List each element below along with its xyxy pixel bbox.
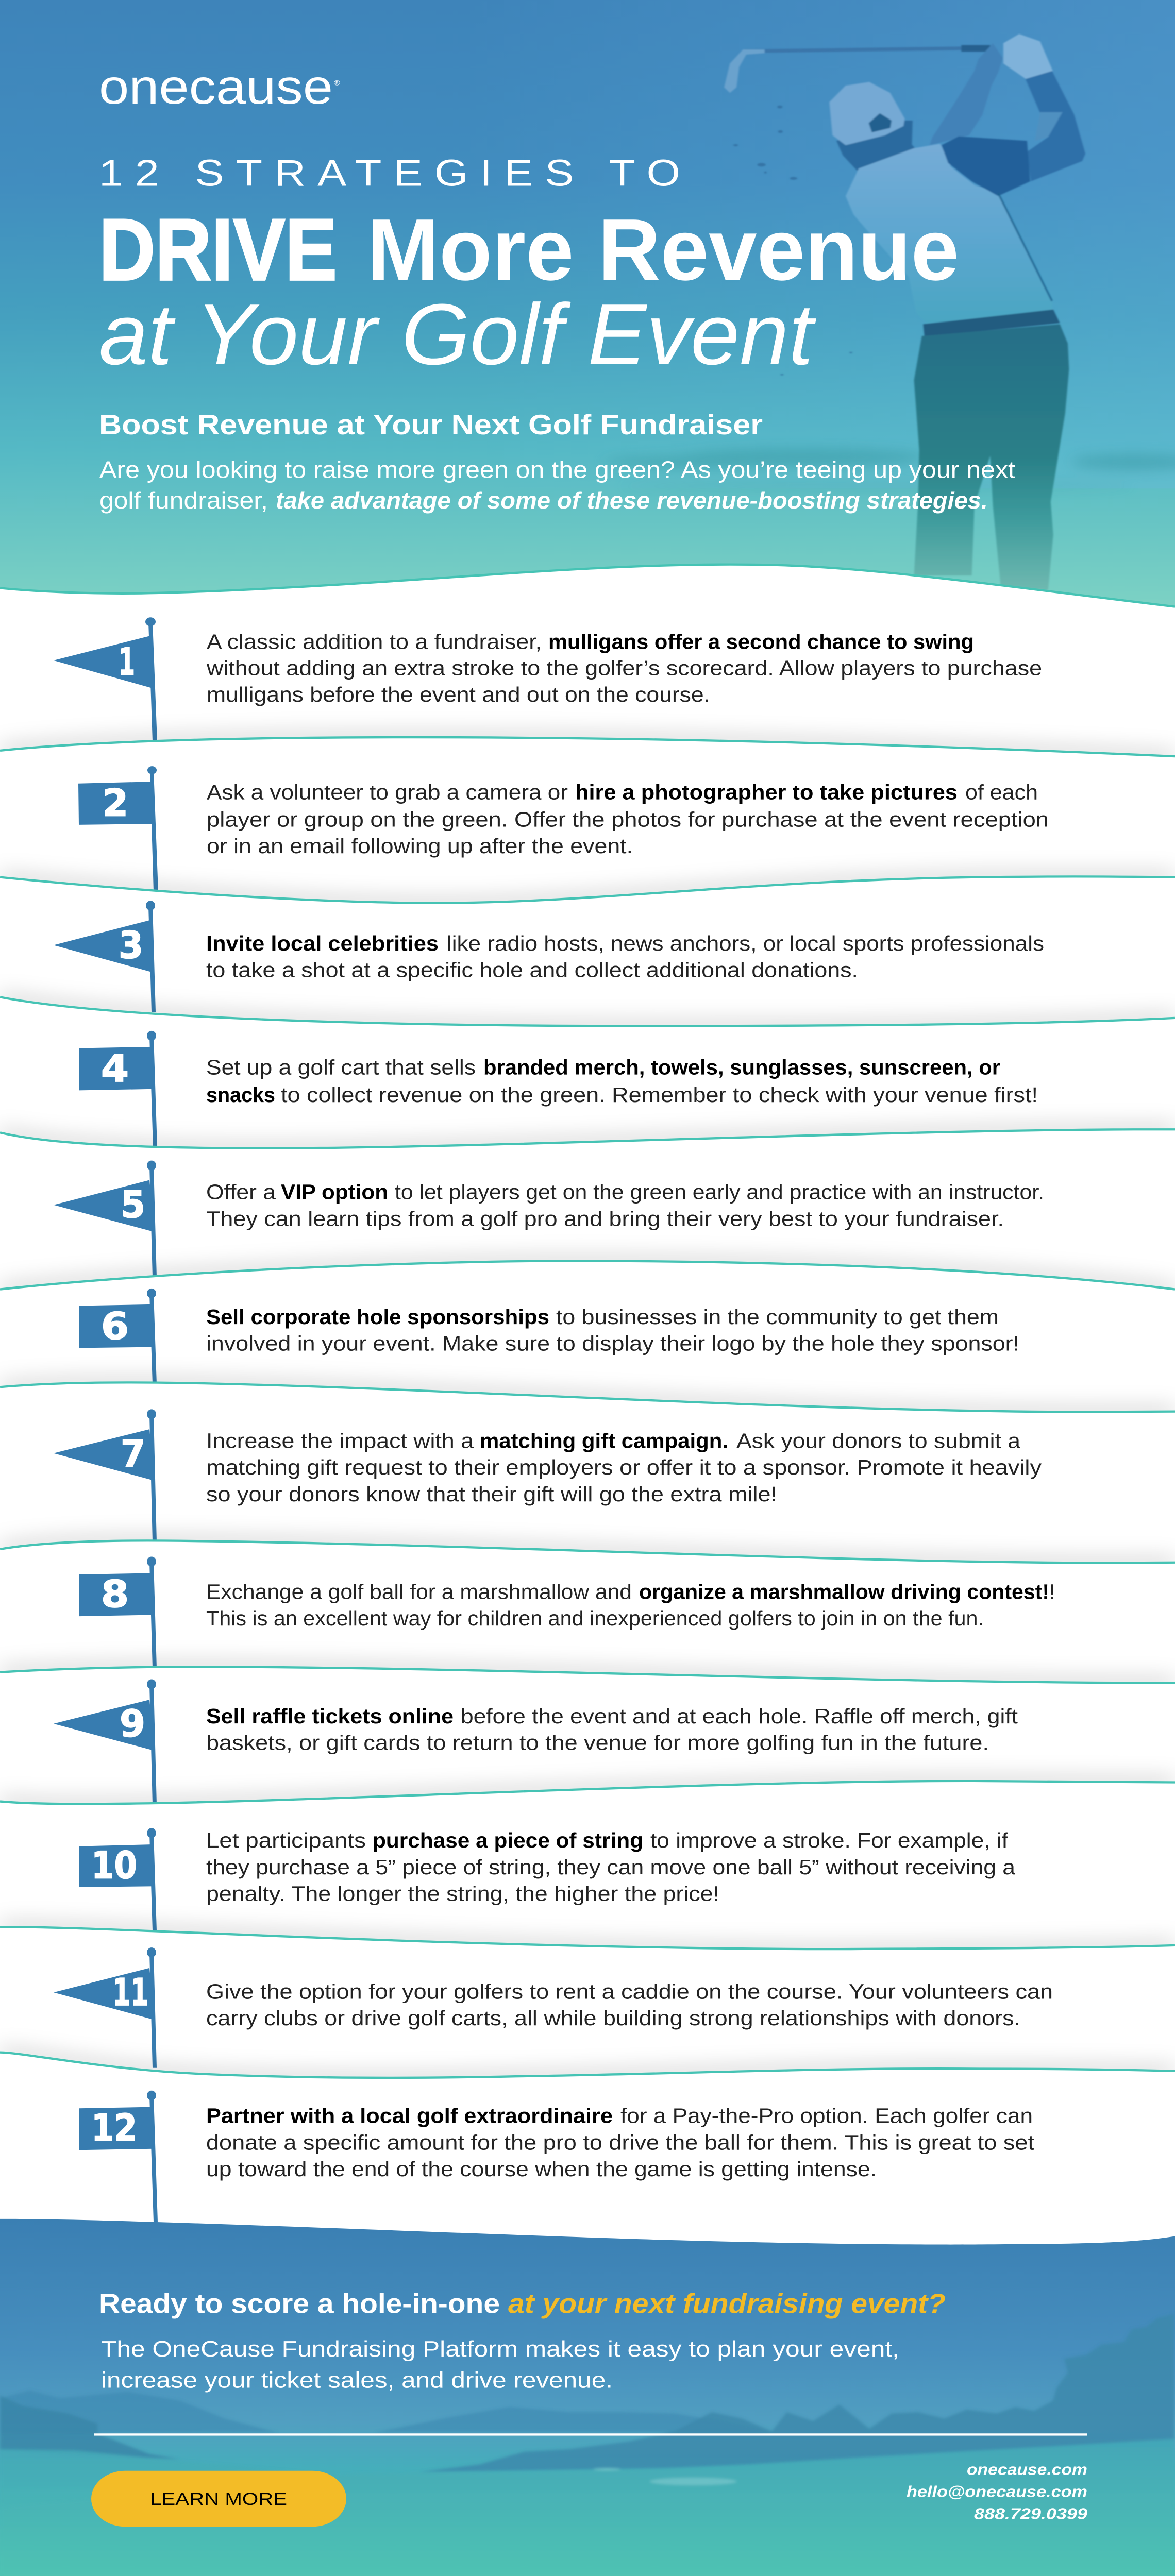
strategy 4 text: Set up a golf cart that sells xyxy=(206,1056,476,1079)
belt xyxy=(923,310,1060,337)
flag 9 xyxy=(54,1679,157,1805)
title: DRIVE xyxy=(99,201,337,298)
strategy 8 text xyxy=(206,1580,1055,1630)
strategy 5 text: Offer a xyxy=(206,1181,276,1204)
strategy 2 text xyxy=(207,781,1049,858)
strategy 3 text xyxy=(206,932,1044,982)
strategy 2 text: of each xyxy=(965,781,1038,804)
intro text: take advantage of some of these revenue-boosting strategies. xyxy=(276,487,988,514)
strategy 11 text: Give the option for your golfers to rent a caddie on the course. Your volunteers can xyxy=(206,1980,1053,2004)
subheading: Boost Revenue at Your Next Golf Fundraiser xyxy=(99,409,763,440)
contact details xyxy=(907,2461,1088,2522)
glove xyxy=(1003,34,1053,79)
strategy 5 text: to let players get on the green early and practice with an instructor. xyxy=(395,1181,1044,1204)
strategy 12 text: up toward the end of the course when the game is getting intense. xyxy=(206,2158,877,2181)
strategy 6 text xyxy=(206,1306,1019,1355)
flag 7: 7 xyxy=(121,1432,145,1476)
call to action body: increase your ticket sales, and drive revenue. xyxy=(101,2368,613,2393)
flag 5 xyxy=(54,1161,157,1277)
title: 12 STRATEGIES TO xyxy=(99,152,680,194)
flag 8: 8 xyxy=(101,1572,129,1616)
flag 1 xyxy=(54,617,157,742)
contact details: hello@onecause.com xyxy=(907,2483,1087,2500)
flying dirt xyxy=(733,106,852,376)
cap opening xyxy=(869,113,892,132)
strategy 1 text: without adding an extra stroke to the golfer’s scorecard. Allow players to purchase xyxy=(206,656,1042,680)
learn more button: LEARN MORE xyxy=(150,2489,287,2509)
golf course scenery xyxy=(0,2314,1174,2576)
learn more button xyxy=(91,2471,346,2527)
flag 4: 4 xyxy=(101,1047,129,1091)
flag 11 xyxy=(54,1947,157,2068)
strategy 4 text: branded merch, towels, sunglasses, sunscreen, or xyxy=(483,1056,1000,1079)
call to action body xyxy=(101,2336,899,2393)
golfer photo silhouette xyxy=(724,34,1085,590)
call to action heading: Ready to score a hole-in-one xyxy=(99,2289,500,2319)
strategy 3 text: like radio hosts, news anchors, or local sports professionals xyxy=(447,932,1044,955)
divider wave 5 xyxy=(0,1261,1175,2265)
flag 9: 9 xyxy=(120,1702,145,1745)
divider wave 6 xyxy=(0,1382,1175,2265)
flag 2: 2 xyxy=(103,782,128,825)
strategy 1 text: mulligans offer a second chance to swing xyxy=(548,630,974,654)
flag 10: 10 xyxy=(91,1844,137,1887)
strategy 10 text: they purchase a 5” piece of string, they can move one ball 5” without receiving a xyxy=(206,1856,1016,1879)
flag 12: 12 xyxy=(91,2107,137,2150)
strategy 9 text: before the event and at each hole. Raffle off merch, gift xyxy=(461,1705,1018,1728)
divider line xyxy=(94,2433,1087,2436)
flag 7 xyxy=(54,1409,157,1543)
strategy 12 text: donate a specific amount for the pro to drive the ball for them. This is great to set xyxy=(206,2131,1034,2155)
trousers xyxy=(914,324,1069,590)
strategy 4 text xyxy=(206,1056,1038,1107)
blurred treeline background xyxy=(603,449,1175,490)
strategy 9 text: baskets, or gift cards to return to the venue for more golfing fun in the future. xyxy=(206,1732,989,1755)
section 1 white band with wave edge xyxy=(0,565,1175,2265)
right forearm xyxy=(1025,71,1085,181)
strategy 5 text xyxy=(206,1181,1044,1231)
intro text: Are you looking to raise more green on the green? As you’re teeing up your next xyxy=(99,456,1015,483)
contact details: 888.729.0399 xyxy=(974,2505,1088,2522)
strategy 8 text: ! xyxy=(1049,1580,1055,1604)
strategy 4 text: snacks xyxy=(206,1083,275,1107)
divider wave 11 xyxy=(0,2053,1175,2265)
strategy 12 text: for a Pay-the-Pro option. Each golfer can xyxy=(620,2105,1033,2128)
logo: ® xyxy=(334,79,340,87)
flag 4 xyxy=(79,1031,157,1147)
strategy 6 text: involved in your event. Make sure to display their logo by the hole they sponsor! xyxy=(206,1332,1019,1355)
strategy 1 text: A classic addition to a fundraiser, xyxy=(207,630,542,654)
contact details: onecause.com xyxy=(967,2461,1087,2478)
strategy 5 text: They can learn tips from a golf pro and bring their very best to your fundraiser. xyxy=(206,1207,1004,1231)
strategy 2 text: hire a photographer to take pictures xyxy=(575,781,958,804)
strategy 10 text: Let participants xyxy=(206,1829,366,1852)
shirt edge line xyxy=(998,193,1052,301)
flag 8 xyxy=(79,1557,157,1669)
shirt xyxy=(846,144,1053,323)
divider wave 1 xyxy=(0,737,1175,2265)
strategy 11 text: carry clubs or drive golf carts, all while building strong relationships with donors. xyxy=(206,2007,1020,2030)
call to action heading: at your next fundraising event? xyxy=(508,2289,946,2319)
strategy 12 text xyxy=(206,2105,1034,2181)
call to action heading xyxy=(99,2289,946,2319)
strategy 10 text: purchase a piece of string xyxy=(373,1829,643,1852)
strategy 2 text: player or group on the green. Offer the photos for purchase at the event reception xyxy=(207,808,1049,832)
strategy 2 text: Ask a volunteer to grab a camera or xyxy=(207,781,568,804)
title: More Revenue xyxy=(367,201,959,298)
hero panel xyxy=(0,0,1175,622)
title xyxy=(99,152,959,383)
flag 3 xyxy=(54,901,156,1012)
strategy 7 text: matching gift request to their employers or offer it to a sponsor. Promote it heavily xyxy=(206,1456,1042,1479)
title: at Your Golf Event xyxy=(99,286,816,383)
intro text xyxy=(99,456,1015,514)
strategy 9 text: Sell raffle tickets online xyxy=(206,1705,454,1728)
left arm and hand xyxy=(930,43,1003,145)
cap xyxy=(829,82,905,145)
strategy 4 text: to collect revenue on the green. Remember to check with your venue first! xyxy=(281,1083,1038,1107)
flag 6: 6 xyxy=(101,1305,129,1348)
strategy 7 text: matching gift campaign. xyxy=(480,1429,728,1453)
strategy 5 text: VIP option xyxy=(281,1181,388,1204)
inner arm highlight xyxy=(1035,112,1063,141)
strategy 10 text: to improve a stroke. For example, if xyxy=(650,1829,1009,1852)
divider wave 9 xyxy=(0,1781,1175,2265)
strategy 3 text: to take a shot at a specific hole and collect additional donations. xyxy=(206,959,858,982)
neck and head xyxy=(836,121,917,171)
strategy 1 text xyxy=(206,630,1042,706)
sleeve xyxy=(942,137,1030,196)
flag 6 xyxy=(79,1289,157,1384)
strategy 6 text: Sell corporate hole sponsorships xyxy=(206,1306,549,1329)
call to action body: The OneCause Fundraising Platform makes it easy to plan your event, xyxy=(101,2336,899,2361)
divider wave 8 xyxy=(0,1667,1175,2265)
strategy 12 text: Partner with a local golf extraordinaire xyxy=(206,2105,613,2128)
strategy 7 text: Increase the impact with a xyxy=(206,1429,474,1453)
strategy 1 text: mulligans before the event and out on the course. xyxy=(207,683,710,706)
flag 12 xyxy=(79,2091,158,2222)
strategy 2 text: or in an email following up after the event. xyxy=(207,835,633,858)
strategy 7 text xyxy=(206,1429,1042,1506)
strategy 6 text: to businesses in the community to get them xyxy=(556,1306,999,1329)
strategy 10 text: penalty. The longer the string, the higher the price! xyxy=(206,1883,719,1906)
intro text: golf fundraiser, xyxy=(99,487,268,514)
footer panel xyxy=(0,2219,1175,2576)
strategy 7 text: so your donors know that their gift will go the extra mile! xyxy=(206,1483,777,1506)
divider wave 7 xyxy=(0,1540,1175,2265)
strategy 11 text xyxy=(206,1980,1053,2030)
flag 3: 3 xyxy=(119,924,143,967)
strategy 10 text xyxy=(206,1829,1016,1906)
flag 2 xyxy=(78,766,158,892)
divider wave 2 xyxy=(0,876,1175,2265)
divider wave 3 xyxy=(0,997,1175,2265)
strategy 8 text: organize a marshmallow driving contest! xyxy=(639,1580,1049,1604)
flag 11: 11 xyxy=(112,1971,148,2014)
strategy 8 text: This is an excellent way for children and inexperienced golfers to join in on the fun. xyxy=(206,1607,984,1630)
flag 5: 5 xyxy=(121,1183,145,1226)
flag 10 xyxy=(79,1828,157,1931)
strategy 8 text: Exchange a golf ball for a marshmallow and xyxy=(206,1580,632,1604)
flag 1: 1 xyxy=(119,640,135,684)
golf club xyxy=(724,45,990,93)
strategy 9 text xyxy=(206,1705,1018,1755)
divider wave 10 xyxy=(0,1927,1175,2265)
strategy 7 text: Ask your donors to submit a xyxy=(736,1429,1021,1453)
logo: onecause xyxy=(99,59,333,114)
strategy 3 text: Invite local celebrities xyxy=(206,932,439,955)
divider wave 4 xyxy=(0,1129,1175,2265)
